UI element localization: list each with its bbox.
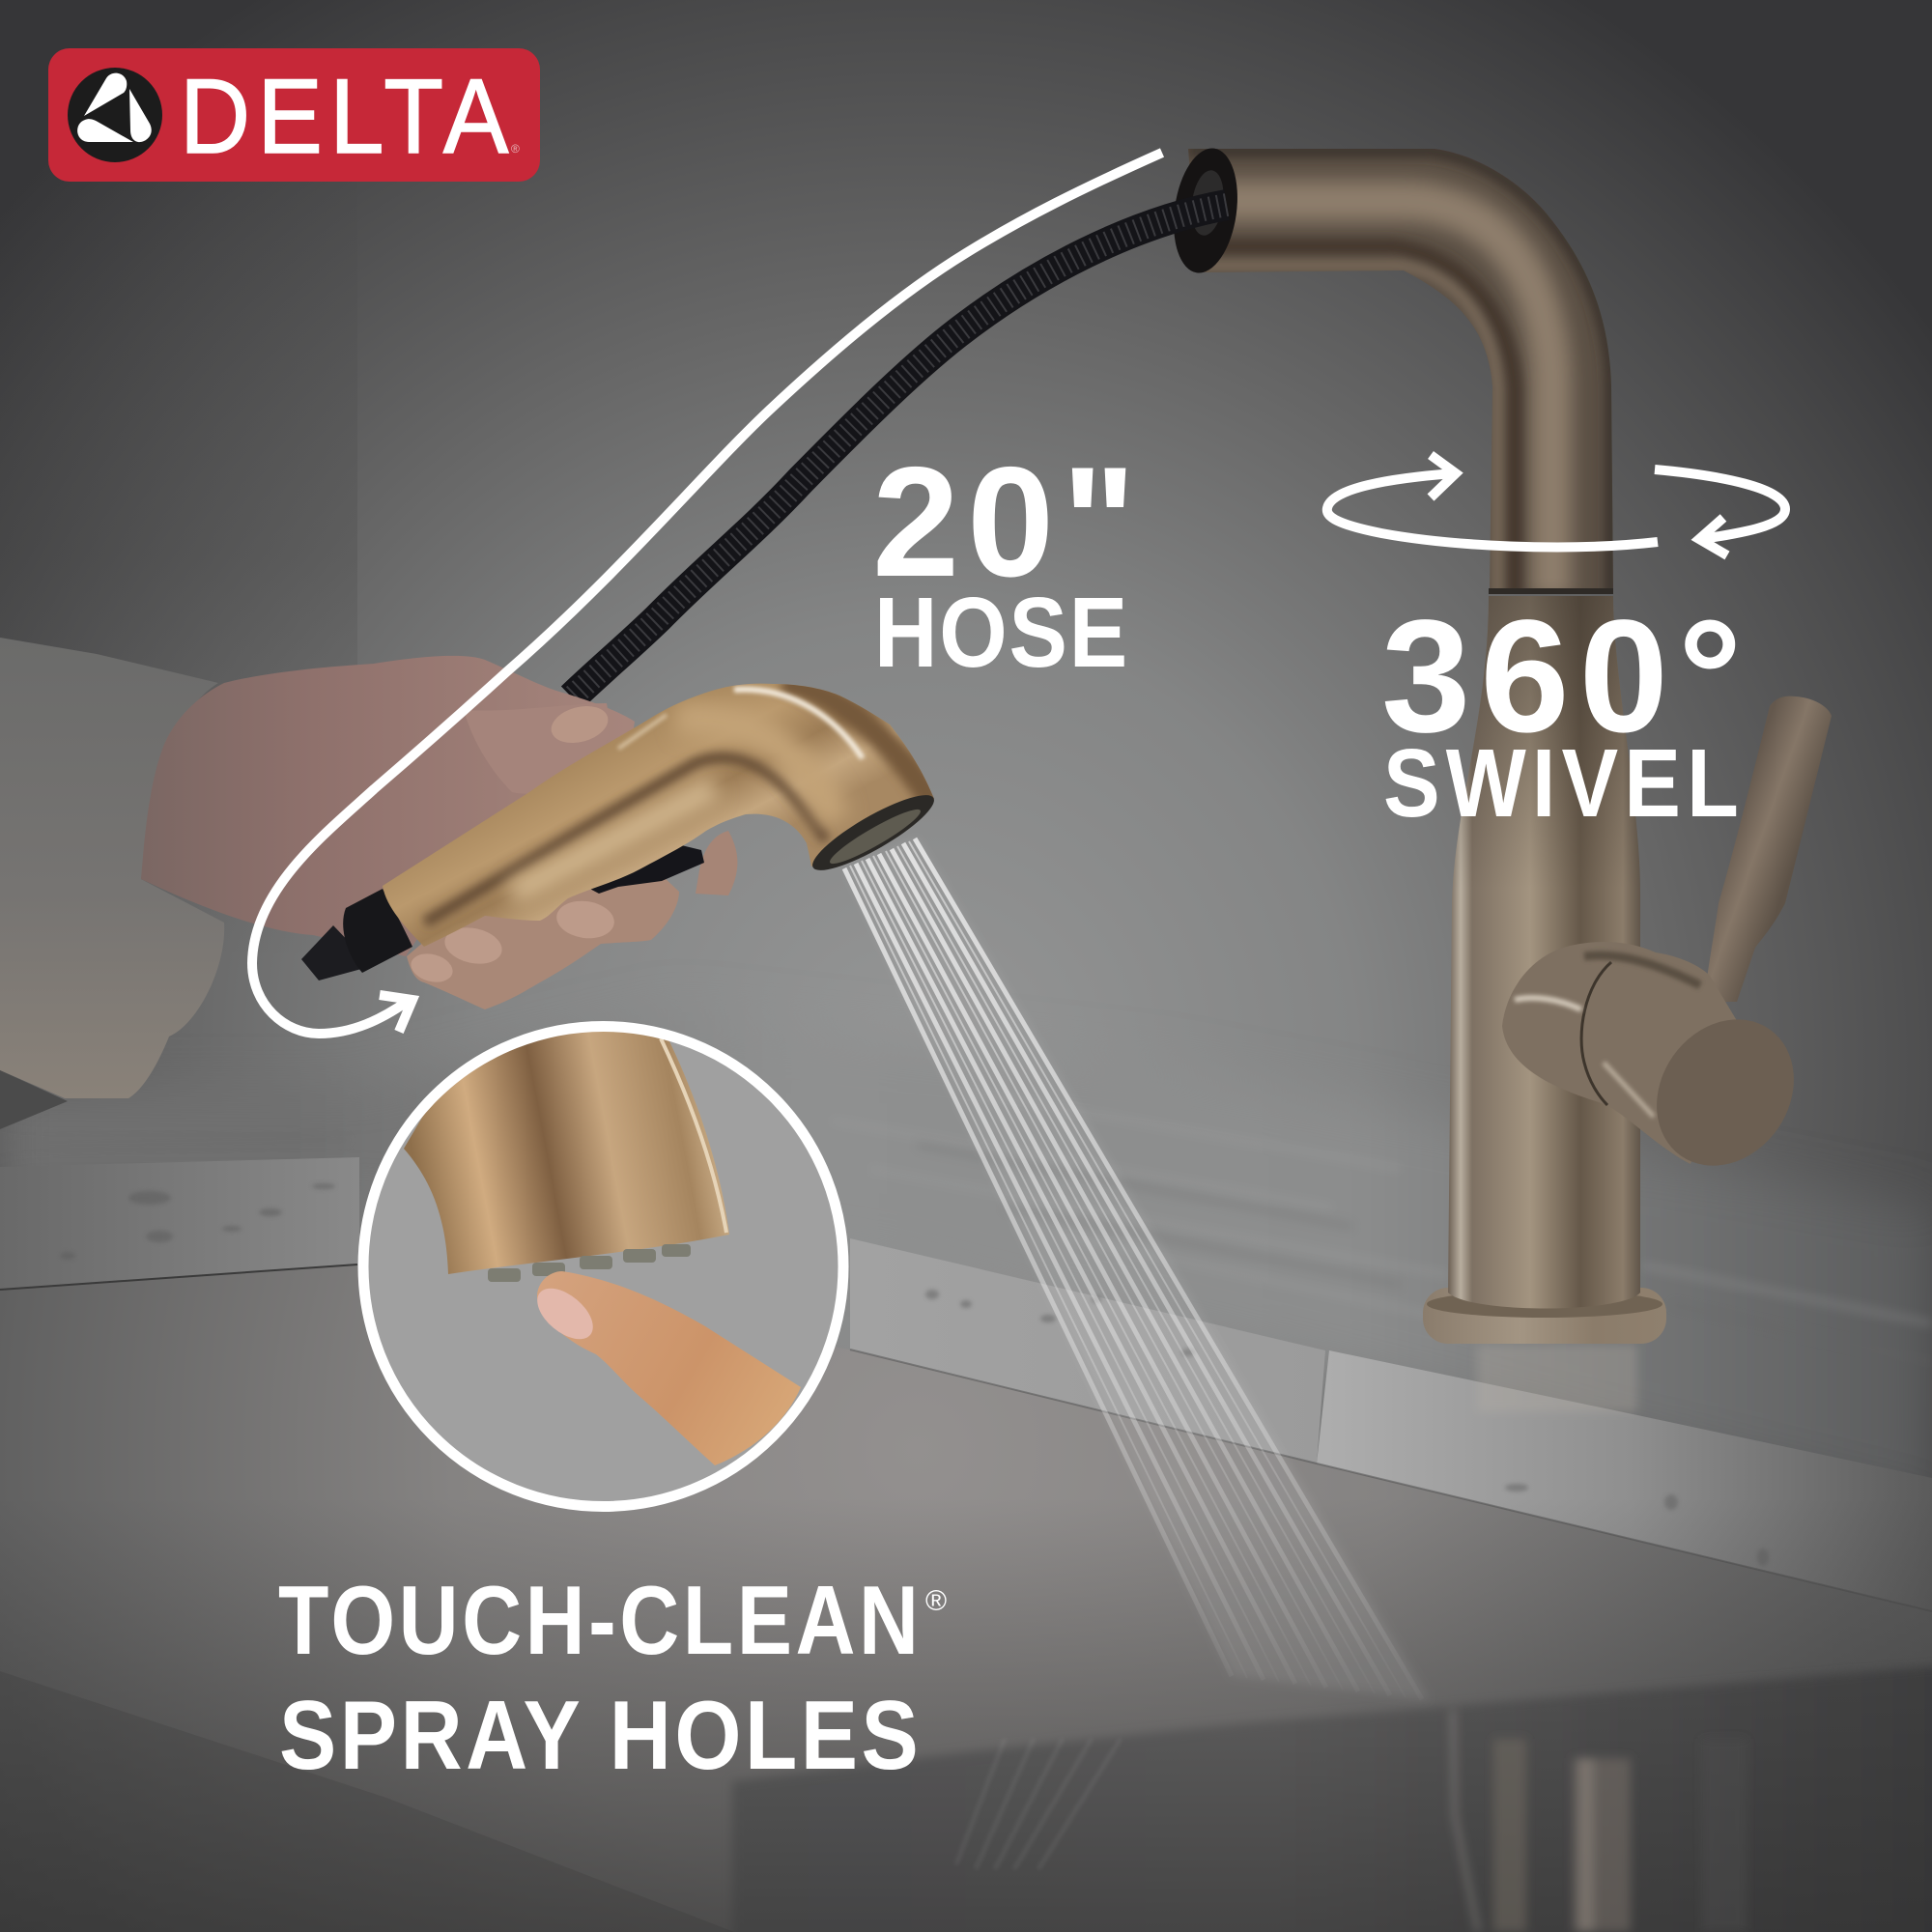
label: 20 inch hose: 20": [872, 435, 1144, 610]
thumbnail: [547, 700, 612, 749]
swivel arrows: [1327, 455, 1785, 555]
hose: [572, 205, 1227, 697]
handle hub: [1502, 942, 1739, 1164]
marble countertop surface: [0, 1014, 1932, 1507]
lower fingers: [407, 860, 679, 1009]
label: touch-clean spray holes: TOUCH-CLEAN: [278, 1565, 919, 1675]
faucet base reflection on counter: [1477, 1345, 1637, 1412]
kitchen counter and sink: [0, 1014, 1932, 1932]
sprayer collar: [343, 889, 412, 973]
faucet lower body: [1448, 596, 1640, 1308]
handle cap: [1629, 993, 1822, 1192]
index fingertip: [696, 831, 737, 895]
sprayer nozzle: [805, 783, 942, 882]
label: touch-clean spray holes: [278, 1565, 947, 1790]
label: 360 degree swivel: 360°: [1381, 587, 1751, 766]
back of hand: [141, 656, 635, 956]
inset fingernail: [537, 1289, 593, 1339]
sleeve: [0, 638, 224, 1129]
inset nozzle brass: [404, 1014, 729, 1274]
faucet spout: [1188, 149, 1613, 588]
label: 20 inch hose: HOSE: [874, 577, 1127, 688]
sink basin: [0, 1264, 1932, 1932]
faucet neck shading: [1452, 596, 1640, 903]
sprayer threaded end: [301, 925, 372, 980]
inset spray holes: [488, 1244, 691, 1282]
water spray: [844, 838, 1430, 1869]
counter front edge: [850, 1238, 1932, 1611]
hose length arrow: [252, 153, 1162, 1034]
registered mark: ®: [511, 142, 520, 156]
inset brass edge highlight: [661, 1038, 726, 1233]
spout mouth: [1166, 144, 1245, 277]
hand: [141, 656, 737, 1009]
inset circle: touch-clean spray holes: [363, 1014, 843, 1507]
spray reflection: [956, 1739, 1121, 1869]
faucet base: [1423, 1288, 1666, 1344]
logo wordmark: DELTA: [180, 57, 509, 176]
logo mark: [68, 68, 162, 162]
logo: Delta: [48, 48, 540, 182]
faucet: [1159, 135, 1832, 1344]
label: touch-clean spray holes: ®: [925, 1585, 947, 1617]
faucet reflection in sink: [1453, 1710, 1747, 1932]
sprayer body: [383, 684, 934, 947]
sprayer head: [301, 667, 947, 980]
counter left edge: [0, 1157, 359, 1290]
thumb: [464, 703, 609, 794]
inset finger: [537, 1271, 801, 1465]
fingernails: [408, 897, 616, 986]
lower left sink curve: [0, 1671, 734, 1932]
handle lever: [1704, 696, 1832, 1002]
label: 360 degree swivel: SWIVEL: [1383, 729, 1739, 837]
sink ledge and right side: [732, 1666, 1932, 1932]
label: 20 inch hose: [872, 435, 1144, 688]
label: touch-clean spray holes: SPRAY HOLES: [279, 1682, 919, 1790]
sprayer trigger: [584, 843, 704, 894]
